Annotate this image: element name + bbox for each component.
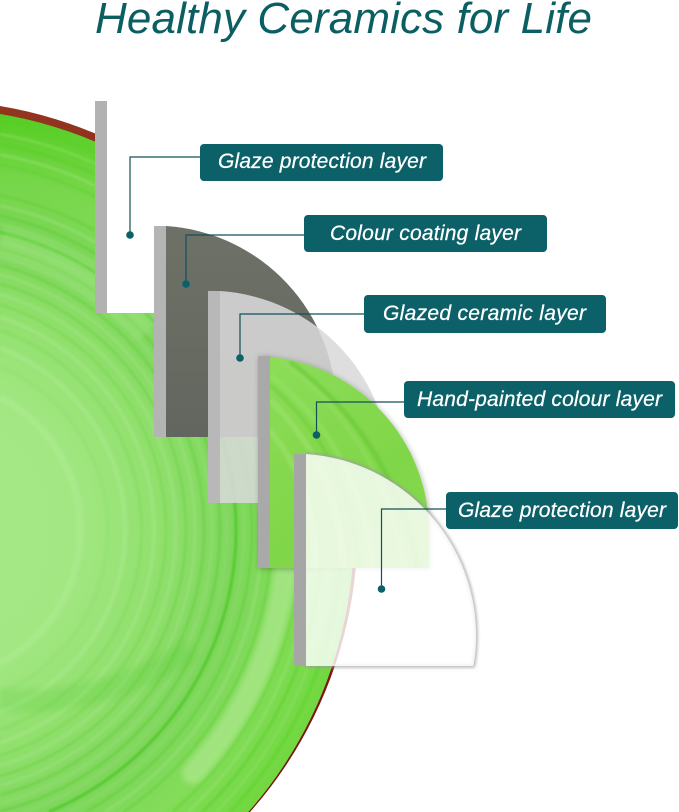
label: glazed ceramic layer: Glazed ceramic layer — [383, 302, 587, 325]
layer 3: glazed ceramic layer — [208, 291, 390, 503]
label: colour coating layer: Colour coating layer — [330, 222, 522, 245]
layer 1: glaze protection layer, white sheet with grey edge — [95, 0, 679, 313]
label: hand-painted colour layer — [313, 381, 675, 439]
plate with green swirl glaze and red rim — [0, 100, 358, 812]
layer 2: colour coating layer — [154, 226, 336, 437]
label: glaze protection layer (top): Glaze protection layer — [218, 150, 427, 173]
label: glaze protection layer (bottom): Glaze protection layer — [458, 499, 667, 522]
label: glaze protection layer (bottom) — [378, 492, 678, 593]
label: colour coating layer — [182, 215, 547, 288]
label: glaze protection layer (top) — [126, 144, 443, 239]
layer 5: glaze protection layer, translucent — [294, 454, 476, 666]
layer 4: hand-painted colour layer — [256, 354, 432, 572]
label: hand-painted colour layer: Hand-painted colour layer — [417, 388, 663, 411]
label: glazed ceramic layer — [236, 295, 606, 362]
